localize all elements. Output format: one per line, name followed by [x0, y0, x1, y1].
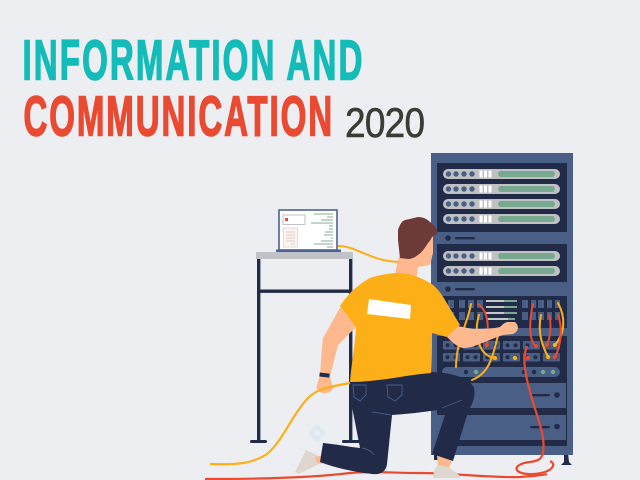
left arm and hand [316, 306, 357, 393]
heading: communication: COMMUNICATION [24, 84, 332, 148]
rack unit: upper servers [437, 163, 567, 232]
t-shirt [340, 273, 460, 382]
cable: laptop to neck [338, 246, 402, 262]
laptop [276, 210, 341, 252]
title [22, 28, 425, 148]
hair [398, 217, 438, 259]
rack unit: patch panel [437, 296, 567, 328]
trousers [320, 372, 475, 474]
heading: year: 2020 [345, 100, 425, 147]
patch cables [456, 303, 563, 380]
rack unit: middle servers [437, 244, 567, 282]
cable: red floor cable [205, 346, 553, 479]
front ankle and shoe [433, 455, 460, 478]
neck and face [395, 228, 433, 276]
table [250, 252, 360, 443]
rack unit: switch modules [437, 336, 567, 378]
right arm and hand [447, 322, 518, 348]
shirt label [367, 299, 411, 319]
heading: information and: INFORMATION AND [22, 28, 362, 92]
back ankle [315, 455, 324, 464]
rack unit: lower drawers [437, 378, 567, 446]
back shoe [295, 450, 321, 474]
person [210, 217, 518, 478]
wristband [319, 373, 330, 378]
server rack [431, 153, 573, 465]
cable in hand [210, 383, 350, 464]
trouser details [353, 385, 462, 455]
decorative diamond [308, 424, 326, 442]
